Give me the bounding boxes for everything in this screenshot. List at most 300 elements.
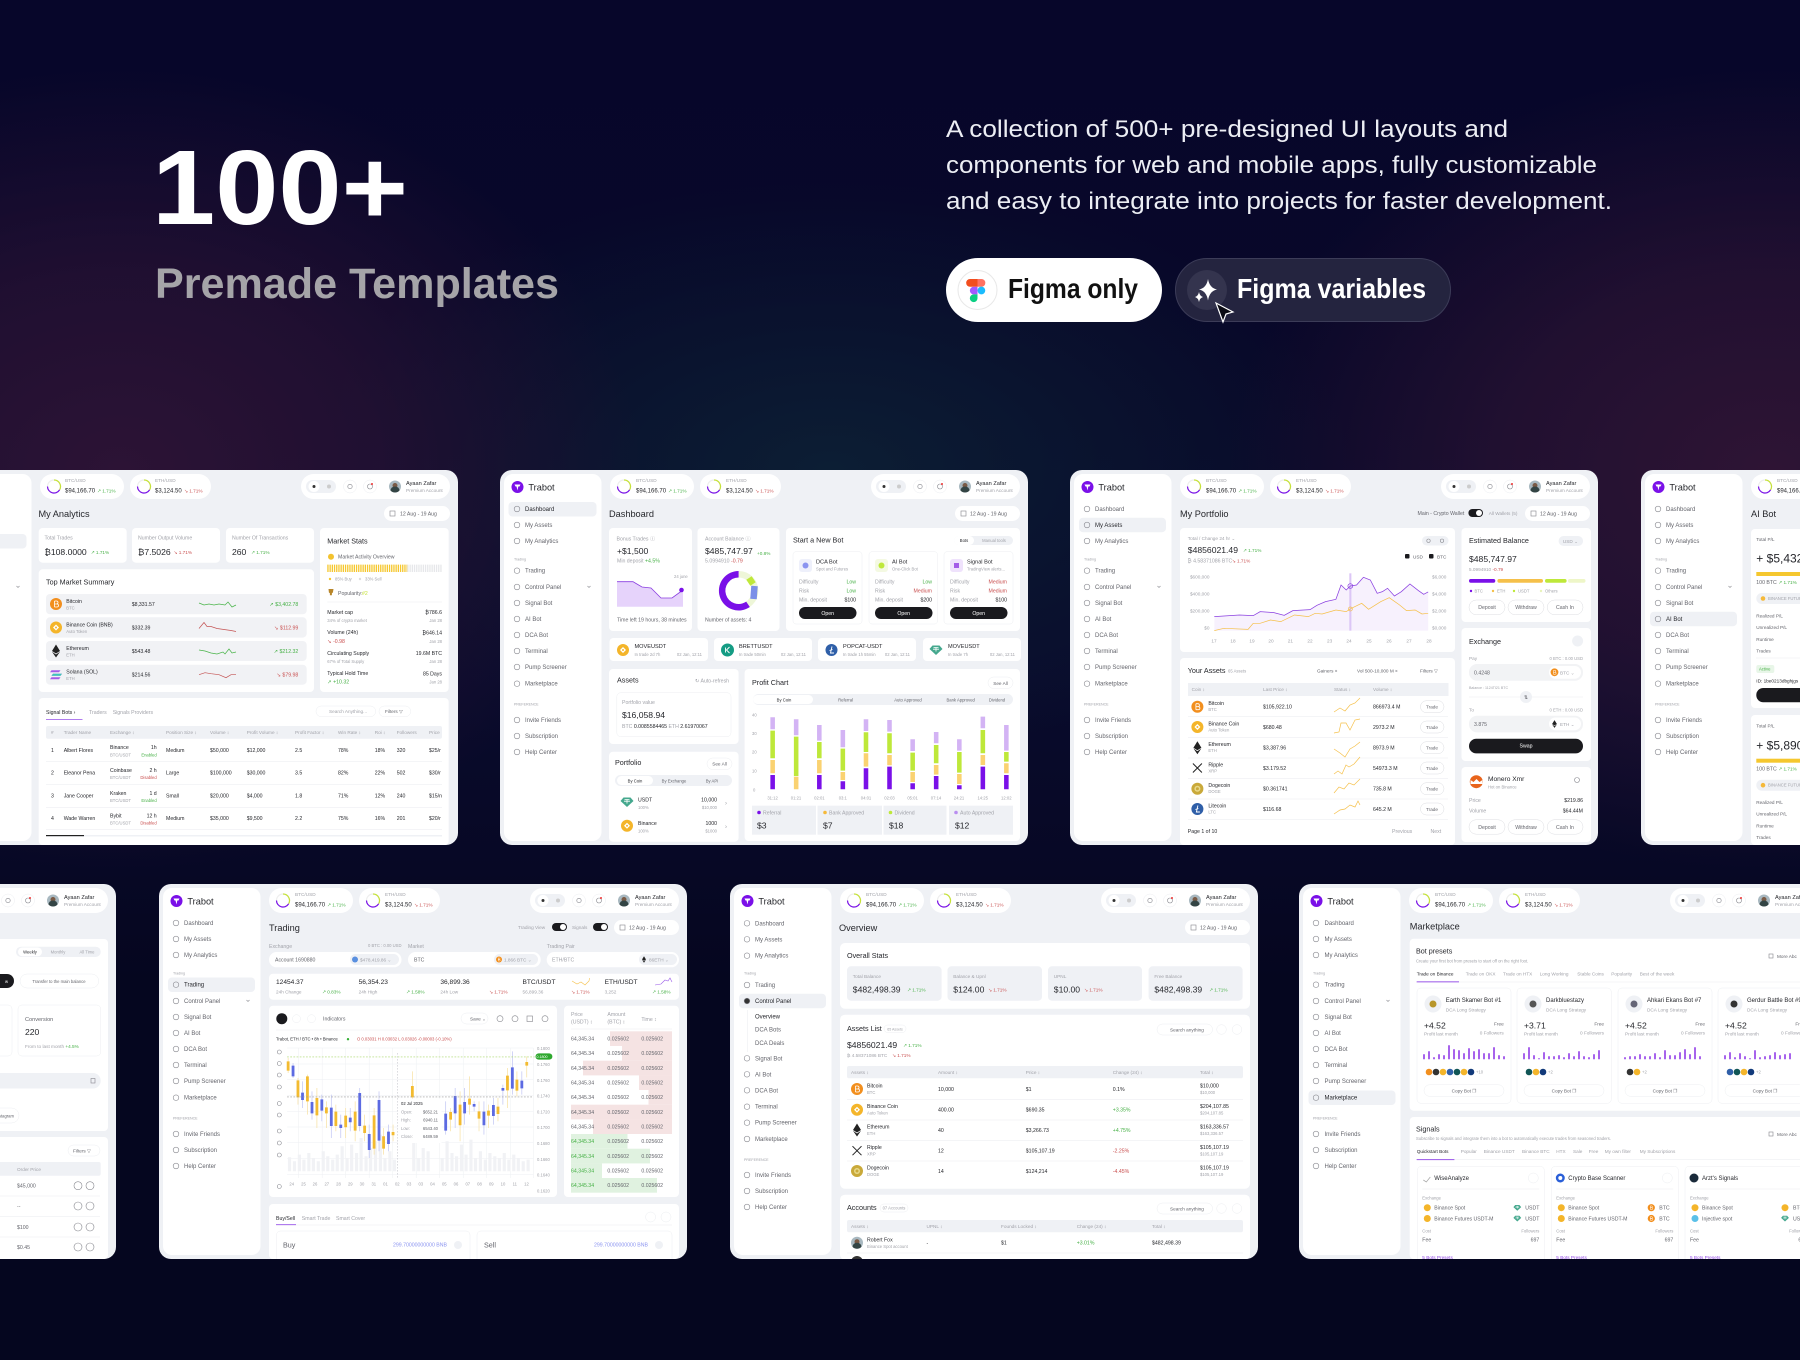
panel: market stats: Market Activity Overview [338, 554, 395, 560]
panel: order book: 0.025602 [607, 1066, 629, 1072]
panel: exchange: Swap [1520, 744, 1533, 750]
sidebar: My Assets [1095, 523, 1122, 529]
sidebar: PREFERENCE [744, 1158, 769, 1162]
panel: signal bots table: Exchange ↕ [110, 730, 134, 735]
panel: start a new bot: Medium [914, 588, 932, 594]
ticker stats bar: 56,899.36 [522, 989, 544, 994]
sidebar: My Analytics [1666, 539, 1699, 545]
top bar: $94,166.70 [1435, 902, 1466, 908]
panel: exchange: Exchange [1469, 637, 1501, 646]
bot preset card 4: Profit last month [1725, 1032, 1759, 1037]
ticker stats bar: 12454.37 [276, 979, 304, 986]
panel: assets list: $3,266.73 [1026, 1128, 1049, 1134]
view toggles and date picker: 12 Aug - 19 Aug [629, 926, 666, 932]
top bar: ETH/USD [956, 892, 977, 897]
panel: order book: 64,345.34 [571, 1051, 594, 1057]
panel: accounts: Total ↕ [1152, 1224, 1166, 1229]
signal card: Arzt's Signals: Arzt's Signals [1702, 1176, 1738, 1182]
panel: assets list: Auto Token [867, 1110, 889, 1116]
panel: portfolio line chart: $0 [1204, 626, 1210, 630]
panel: start a new bot: One-Click Bot [892, 566, 919, 572]
panel: profit chart: 14:25 [977, 796, 989, 800]
panel: assets list: $105,107.19 [1200, 1145, 1229, 1151]
panel: order book: 0.025602 [607, 1139, 629, 1145]
sidebar: Pump Screener [525, 665, 567, 671]
panel: portfolio: $10,000 [702, 805, 718, 810]
panel: bonus trades [609, 528, 692, 631]
panel: order book: (BTC) ↕ [607, 1020, 625, 1026]
sidebar: Help Center [1324, 1164, 1357, 1170]
market selectors: $478,419.86 ⌄ [360, 957, 391, 962]
sidebar: Trabot [1669, 482, 1696, 492]
panel: assets list: ↘ 1.71% [892, 1053, 911, 1058]
panel: portfolio: 100% [638, 805, 649, 810]
top bar: Ayaan Zafar [635, 895, 666, 901]
panel: candlestick chart: 06 [454, 1182, 459, 1186]
market selectors: ETH/BTC [552, 958, 574, 964]
panel: signal bots table: Large [166, 770, 179, 776]
panel: portfolio line chart: 23 [1327, 638, 1333, 644]
stat cards: ↗ 1.71% [91, 550, 109, 555]
panel: market stats: 67% of Total Supply [327, 659, 365, 664]
signal card: Crypto Base Scanner: 697 [1665, 1238, 1673, 1244]
sidebar: Subscription [755, 1189, 788, 1195]
panel: candlestick chart: 30 [360, 1182, 365, 1186]
panel: assets list: $105,107.19 [1200, 1172, 1224, 1177]
panel: profit chart: 10 [752, 768, 757, 774]
panel: candlestick chart: 0.1620 [537, 1188, 550, 1194]
top bar: Ayaan Zafar [976, 481, 1007, 487]
panel: conversion: Weekly [23, 950, 38, 955]
top bar: ETH/USD [155, 478, 176, 483]
panel: your assets: Ripple [1208, 762, 1223, 768]
panel: exchange: 0 BTC : 0.00 USD [1549, 656, 1583, 661]
panel: signal bots table: Disabled [140, 775, 157, 780]
panel: signals: Free [1589, 1149, 1599, 1154]
panel: conversion: w [5, 979, 9, 984]
panel: profit chart: $7 [823, 821, 833, 831]
panel: portfolio: By Coin [628, 778, 643, 783]
screenshot card: Overview [730, 884, 1258, 1268]
panel: buy and sell: Sell [484, 1240, 496, 1250]
panel: portfolio: 100% [638, 828, 649, 834]
panel: signal bots table: Small [166, 794, 179, 800]
panel: account balance: 5.0994910 -0.79 [705, 559, 743, 565]
panel: bot presets: Stable Coins [1577, 971, 1605, 976]
sidebar: Terminal [1666, 649, 1689, 655]
screenshot card: partial referral page [0, 884, 116, 1259]
button: Figma variables [1176, 258, 1450, 322]
description text [946, 116, 1612, 215]
panel: profit chart: 12:02 [1001, 796, 1012, 800]
panel: start a new bot: AI Bot [892, 560, 908, 566]
bot preset card 4: +2 [1756, 1070, 1761, 1074]
panel: assets list: -4.45% [1113, 1169, 1130, 1175]
sidebar: Control Panel [184, 999, 220, 1005]
panel: assets list: Assets ↕ [851, 1070, 869, 1075]
sidebar: Subscription [184, 1148, 217, 1154]
panel: market stats: ↗ +10.32 [327, 680, 349, 686]
panel: exchange [1462, 628, 1591, 761]
top bar: $3,124.50 [155, 488, 182, 494]
sidebar: My Assets [1666, 523, 1693, 529]
page title: Overview [839, 923, 878, 933]
panel: profit chart: By Coin [777, 697, 792, 702]
top bar: $3,124.50 [385, 902, 412, 908]
panel: top market summary: ↘ $79.98 [277, 673, 298, 679]
panel: assets list: ETH [867, 1131, 875, 1136]
sidebar: PREFERENCE [1655, 702, 1680, 706]
sidebar: Dashboard [184, 921, 213, 927]
icon: mouse cursor [1216, 303, 1233, 322]
sidebar: DCA Bot [1095, 633, 1118, 639]
panel: estimated balance: BTC [1474, 588, 1483, 594]
top bar: BTC/USD [295, 892, 316, 897]
panel: conversion [0, 939, 108, 1131]
sidebar: Signal Bot [184, 1015, 212, 1021]
panel: order book: 0.025602 [607, 1095, 629, 1101]
panel: order book: 64,345.34 [571, 1154, 594, 1160]
sidebar: My Analytics [755, 954, 788, 960]
panel: bot P/L one: Trades [1756, 648, 1771, 654]
panel: bot P/L one [1751, 529, 1800, 708]
panel: signal bots table: BTC/USDT [110, 798, 131, 803]
panel: portfolio line chart: ₿ 4.58371086 BTC [1188, 558, 1233, 564]
panel: order book: 0.025602 [641, 1168, 663, 1174]
panel: assets list: $4856021.49 [847, 1040, 897, 1050]
panel: signal bots table: 3.5 [295, 770, 302, 776]
panel: start a new bot: Medium [989, 580, 1007, 586]
panel: bot presets: Best of the week [1640, 971, 1675, 976]
panel: accounts: UPNL ↕ [926, 1224, 942, 1229]
ticker cards: In trade 7h [948, 652, 969, 657]
panel: portfolio: By API [706, 778, 718, 783]
sidebar: Dashboard [525, 507, 554, 513]
panel: top market summary: Bitcoin [66, 599, 82, 605]
panel: your assets: Last Price ↕ [1263, 687, 1288, 692]
panel: signal bots table: Win Rate ↕ [338, 730, 361, 735]
top bar: BTC/USD [1206, 478, 1227, 483]
panel: signal bots table: 3 [51, 794, 54, 800]
panel: estimated balance [1462, 528, 1591, 622]
panel: assets list: Amount ↕ [938, 1070, 958, 1075]
top bar: ↘ 1.71% [755, 488, 774, 494]
panel: start a new bot: Risk [799, 588, 809, 594]
panel: market stats: Jan 28 [429, 639, 443, 644]
panel: assets list: Binance Coin [867, 1104, 898, 1110]
bot preset card 3: Copy Bot ❐ [1653, 1088, 1677, 1093]
panel: start a new bot: Risk [950, 588, 960, 594]
panel: assets list: $105,107.19 [1200, 1152, 1224, 1156]
bot preset card 3: Ahkari Ekans Bot #7 [1647, 998, 1702, 1004]
signal card: Crypto Base Scanner: Cost [1556, 1228, 1566, 1234]
sidebar: Subscription [1324, 1148, 1358, 1154]
panel: monero: Volume [1469, 808, 1486, 814]
page title: Dashboard [609, 509, 654, 519]
panel: estimated balance: Cash In [1556, 605, 1574, 611]
top bar [840, 888, 1250, 913]
date picker [384, 506, 450, 521]
panel: overall stats: ↘ 1.71% [988, 988, 1007, 992]
bot preset card 3: Profit last month [1625, 1032, 1659, 1037]
panel: market stats: ↘ -0.98 [327, 639, 345, 645]
panel: start a new bot: Difficulty [799, 580, 819, 586]
signal card: Crypto Base Scanner: Crypto Base Scanner [1568, 1176, 1625, 1182]
panel: signal bots table: $4,000 [247, 794, 263, 800]
signal card: WiseAnalyze: Exchange [1422, 1196, 1442, 1200]
panel: signal bots table: $50,000 [210, 748, 229, 754]
panel: portfolio line chart: 22 [1307, 638, 1313, 644]
panel: market stats: Jan 28 [429, 680, 443, 684]
panel: order book: 0.025602 [641, 1095, 663, 1101]
top bar: Premium Account [635, 902, 672, 907]
sidebar: DCA Bot [1666, 633, 1689, 639]
top bar: $3,124.50 [1296, 488, 1323, 494]
panel: assets list: 65 Assets [887, 1028, 903, 1032]
bot preset card 1: Copy Bot ❐ [1452, 1088, 1476, 1093]
panel: market stats: Volume (24h) [327, 630, 358, 636]
panel: accounts: $1 [1001, 1240, 1007, 1246]
panel: signal bots table: BTC/USDT [110, 752, 131, 758]
sidebar: Trading [1655, 558, 1667, 562]
panel: assets list: Search anything [1170, 1028, 1204, 1032]
sidebar: Terminal [755, 1105, 778, 1111]
panel: market stats: 19.6M BTC [416, 651, 442, 657]
panel: bonus trades: Time left 19 hours, 38 minutes [617, 618, 687, 624]
panel: signals: Sale [1573, 1149, 1583, 1154]
panel: portfolio: By Exchange [662, 778, 687, 783]
market selectors: 86ETH ⌄ [649, 957, 669, 962]
sidebar: My Assets [525, 523, 552, 529]
panel: monero: Hot on Binance [1488, 784, 1517, 790]
sidebar: Pump Screener [1324, 1079, 1366, 1085]
panel: portfolio line chart: $600,000 [1190, 574, 1210, 580]
panel: market stats: 33% Sell [365, 576, 382, 582]
panel: portfolio line chart: $4,000 [1432, 592, 1447, 596]
sidebar: DCA Bots [755, 1028, 781, 1034]
wallet switch and date picker: 12 Aug - 19 Aug [1540, 512, 1577, 518]
panel: overall stats: $124.00 [953, 985, 985, 995]
page title: AI Bot [1751, 509, 1776, 519]
panel: your assets: 65 Assets [1228, 668, 1246, 674]
panel: bot P/L two: Unrealized P/L [1756, 812, 1787, 817]
panel: your assets: DOGE [1208, 789, 1221, 794]
panel: bonus trades: +$1,500 [617, 546, 649, 556]
panel: your assets: 645.2 M [1373, 807, 1392, 813]
panel: candlestick chart: 6543.40 [423, 1126, 439, 1131]
panel: orders table: Order Price [17, 1167, 41, 1172]
panel: bot presets: Trade on HTX [1503, 971, 1533, 976]
panel: signal bots table: Price [429, 730, 440, 735]
panel: order book: 64,345.34 [571, 1139, 594, 1145]
panel: your assets: LTC [1208, 810, 1216, 814]
view toggles and date picker [518, 920, 679, 935]
panel: start a new bot: Open [821, 611, 834, 617]
panel: signal bots table: 1h [151, 745, 157, 751]
bot preset card 2 [1517, 988, 1611, 1103]
panel: portfolio line chart: 28 [1426, 638, 1432, 644]
bar chart [773, 717, 1006, 789]
panel: bot P/L one: Total P/L [1756, 537, 1775, 542]
panel: order book: Time ↕ [641, 1017, 657, 1023]
panel: accounts: Robert Fox [867, 1238, 893, 1244]
sidebar: My Assets [1324, 937, 1352, 943]
panel: your assets: $0.361741 [1263, 786, 1288, 792]
panel: assets [609, 669, 739, 744]
panel: signal bots table: Bybit [110, 814, 122, 820]
panel: top market summary: $8,331.57 [132, 602, 155, 608]
sidebar: Dashboard [755, 921, 784, 927]
panel: bonus trades: 24 june [674, 574, 688, 579]
panel: bot P/L two: 100 BTC ↗ 1.71% [1756, 767, 1797, 773]
panel: portfolio line chart: 24 [1346, 638, 1352, 644]
sidebar: AI Bot [184, 1031, 201, 1037]
panel: start a new bot: Open [972, 611, 985, 617]
sidebar: Trading [1084, 558, 1096, 562]
panel: signal bots table: BTC/USDT [110, 775, 131, 780]
panel: your assets: $3,387.96 [1263, 746, 1286, 752]
sidebar: My Analytics [184, 953, 217, 959]
sidebar: Subscription [1666, 734, 1699, 740]
panel: accounts: Accounts [847, 1203, 877, 1212]
panel: candlestick chart: 31 [371, 1182, 377, 1186]
panel: bot P/L one: 100 BTC ↗ 1.71% [1756, 580, 1797, 586]
panel: your assets: Dogecoin [1208, 783, 1230, 789]
panel: profit chart: Referral [763, 810, 781, 816]
top bar: $94,166.70 [636, 488, 667, 494]
sidebar [1645, 474, 1742, 841]
panel: assets list: Ethereum [867, 1124, 890, 1130]
top bar: Ayaan Zafar [1206, 895, 1237, 901]
panel: start a new bot: TradingView alerts... [967, 566, 1005, 572]
panel: candlestick chart: 0.1720 [537, 1110, 550, 1114]
panel: profit chart: $18 [889, 821, 904, 831]
panel: profit chart: Auto Approved [894, 697, 922, 702]
sidebar: AI Bot [755, 1072, 772, 1078]
panel: orders table [0, 1137, 108, 1259]
panel: assets list: Bitcoin [867, 1084, 883, 1090]
panel: accounts: - [926, 1240, 928, 1246]
bot preset card 1 [1417, 988, 1511, 1103]
panel: assets list: ₿ 4.58371086 BTC [847, 1052, 888, 1058]
sidebar: Trabot [1098, 482, 1125, 492]
sidebar: AI Bot [1095, 617, 1112, 623]
panel: portfolio: › [725, 824, 727, 830]
panel: candlestick chart: 07 [465, 1182, 471, 1186]
panel: market stats: 34% of crypto market [327, 618, 368, 623]
panel: signal bots table: Profit Factor ↕ [295, 730, 324, 735]
panel: order book: 0.025602 [607, 1080, 629, 1086]
panel: portfolio: 10,000 [701, 798, 717, 804]
sidebar: Invite Friends [755, 1173, 791, 1179]
sidebar: Signal Bot [1324, 1015, 1352, 1021]
panel: portfolio line chart: ↗ 1.71% [1243, 548, 1261, 553]
top bar [1180, 474, 1590, 499]
signal card: Crypto Base Scanner: Binance Spot [1568, 1206, 1600, 1212]
panel: bot presets: Bot presets [1416, 946, 1453, 955]
panel: overall stats: Total Balance [853, 974, 881, 979]
panel: signal bots table: 2.2 [295, 816, 302, 822]
panel: signal bots table: $100,000 [210, 770, 232, 776]
panel: candlestick chart: 04 [430, 1182, 435, 1186]
panel: signals: Binance BTC [1522, 1149, 1550, 1154]
signal card: Crypto Base Scanner: BTC [1659, 1216, 1670, 1222]
panel: assets list: $204,107.85 [1200, 1104, 1229, 1110]
panel: assets list: 12 [938, 1148, 944, 1154]
sidebar [163, 888, 260, 1255]
bot preset card 3: 0 Followers [1681, 1030, 1706, 1035]
signal card: Crypto Base Scanner: Followers [1655, 1228, 1673, 1234]
panel: signal bots table: 71% [338, 794, 349, 800]
panel: your assets: Status ↕ [1334, 687, 1351, 692]
panel: assets list: ↗ 1.71% [903, 1043, 922, 1048]
top bar: ↗ 1.71% [97, 488, 116, 494]
top bar: $3,124.50 [726, 488, 753, 494]
panel: buy and sell: Smart Cover [336, 1216, 365, 1222]
sidebar: Dashboard [1095, 507, 1124, 513]
ticker cards: 02 Jan, 12:11 [677, 652, 703, 657]
panel: profit chart: 30 [752, 731, 757, 736]
panel: portfolio: Portfolio [615, 758, 641, 767]
signal card: WiseAnalyze: Cost [1422, 1228, 1432, 1234]
top bar: Premium Account [406, 488, 443, 493]
panel: your assets: 866973.4 M [1373, 704, 1400, 710]
panel: accounts: Founds Locked ↕ [1001, 1224, 1037, 1229]
sidebar: DCA Bot [755, 1088, 778, 1094]
panel: signal bots table: 2.5 [295, 748, 302, 754]
panel: signals [1410, 1117, 1800, 1266]
panel: market stats: ₿786.6 [425, 609, 442, 616]
screenshot card: My Portfolio [1070, 470, 1598, 845]
panel: signal bots table: Albert Flores [64, 748, 94, 754]
signal card: Crypto Base Scanner [1551, 1166, 1678, 1266]
top bar: ↗ 1.71% [898, 902, 917, 908]
panel: profit chart: $3 [757, 821, 767, 831]
panel: order book: 0.025602 [641, 1183, 663, 1189]
panel: your assets: Trade [1426, 807, 1438, 812]
panel: signal bots table: $25/r [429, 748, 441, 754]
panel: your assets: Trade [1426, 786, 1438, 792]
panel: monero: $219.86 [1564, 798, 1583, 804]
panel: candlestick chart: Open: [401, 1110, 412, 1114]
ticker cards: MOVEUSDT [948, 644, 980, 650]
top bar [269, 888, 679, 913]
panel: your assets: Coin ↕ [1192, 687, 1205, 692]
panel: candlestick chart: Trabot, ETH / BTC • 8h • Binance [276, 1036, 339, 1042]
screenshot card: Marketplace [1299, 884, 1800, 1266]
panel: market stats: Circulating Supply [327, 651, 370, 657]
panel: order book: 64,345.34 [571, 1095, 594, 1101]
panel: start a new bot: Min. deposit [799, 598, 828, 604]
panel: your assets: 2973.2 M [1373, 725, 1395, 731]
panel: signal bots table: Eleanor Pena [64, 770, 95, 776]
panel: signal bots table: 240 [397, 794, 405, 800]
panel: start a new bot: Difficulty [950, 580, 970, 586]
panel: assets list: Assets List [847, 1024, 882, 1033]
panel: monero: Withdraw [1515, 825, 1537, 831]
panel: signal bots table: Signal Bots › [46, 710, 76, 716]
panel: bot presets: Create your first bot from presets to start off on the right foot. [1416, 958, 1528, 963]
bot preset card 2: 0 Followers [1580, 1030, 1605, 1035]
panel: start a new bot: Min. deposit [875, 598, 904, 604]
signal card: Crypto Base Scanner: BTC [1659, 1206, 1670, 1212]
panel: monero: Deposit [1478, 825, 1496, 831]
panel: your assets: Trade [1426, 704, 1438, 710]
panel: signal bots table: 1.8 [295, 794, 302, 800]
panel: order book: 0.025602 [641, 1036, 663, 1042]
panel: signal bots table: $9,500 [247, 816, 263, 822]
sidebar: PREFERENCE [1313, 1116, 1338, 1120]
